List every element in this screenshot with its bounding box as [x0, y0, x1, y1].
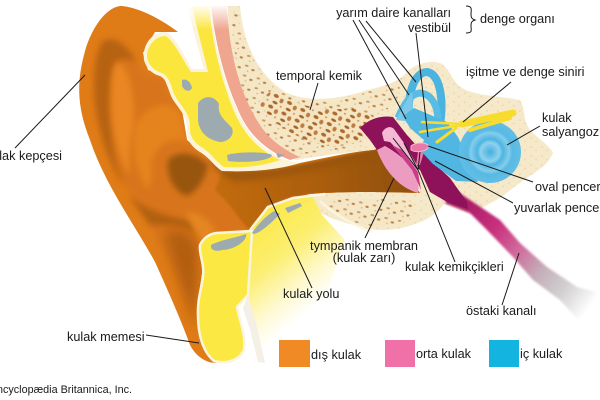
oval window [411, 143, 429, 152]
label: ear canal: kulak yolu [283, 287, 339, 301]
label: balance organ: denge organı [480, 12, 555, 26]
legend: outer ear [279, 340, 362, 367]
label: semicircular canals: yarım daire kanalları [336, 6, 451, 20]
label: earlobe: kulak memesi [67, 330, 145, 344]
pointer lines [15, 20, 540, 343]
ossicles [382, 127, 424, 190]
label: nerve: işitme ve denge siniri [466, 65, 584, 79]
eustachian tube [445, 190, 597, 325]
label: eustachian tube: östaki kanalı [466, 304, 537, 318]
legend: middle ear [385, 340, 472, 367]
lower yellow cartilage [198, 194, 372, 363]
label: vestibule: vestibül [408, 21, 451, 35]
tympanic membrane [377, 146, 419, 193]
legend: inner ear [489, 340, 563, 367]
auditory and vestibular nerve [420, 113, 513, 142]
membrane layer beside bone [211, 6, 300, 160]
temporal bone [228, 6, 553, 230]
label: temporal bone: temporal kemik [276, 69, 363, 83]
legend: inner ear: iç kulak [520, 347, 563, 361]
outer ear [79, 6, 420, 363]
upper yellow cartilage [144, 4, 300, 171]
label: tympanic membrane: tympanik membran [310, 239, 418, 253]
inner ear: semicircular canals and vestibule [396, 72, 478, 182]
cochlea [459, 121, 521, 183]
brace: balance organ [466, 6, 475, 33]
label: tympanic membrane: (kulak zarı) [333, 251, 395, 265]
label: ossicles: kulak kemikçikleri [405, 260, 504, 274]
legend: outer ear: dış kulak [311, 348, 362, 362]
legend: middle ear: orta kulak [416, 347, 472, 361]
label: cochlea: kulak [542, 111, 572, 125]
middle ear cavity [360, 117, 468, 209]
